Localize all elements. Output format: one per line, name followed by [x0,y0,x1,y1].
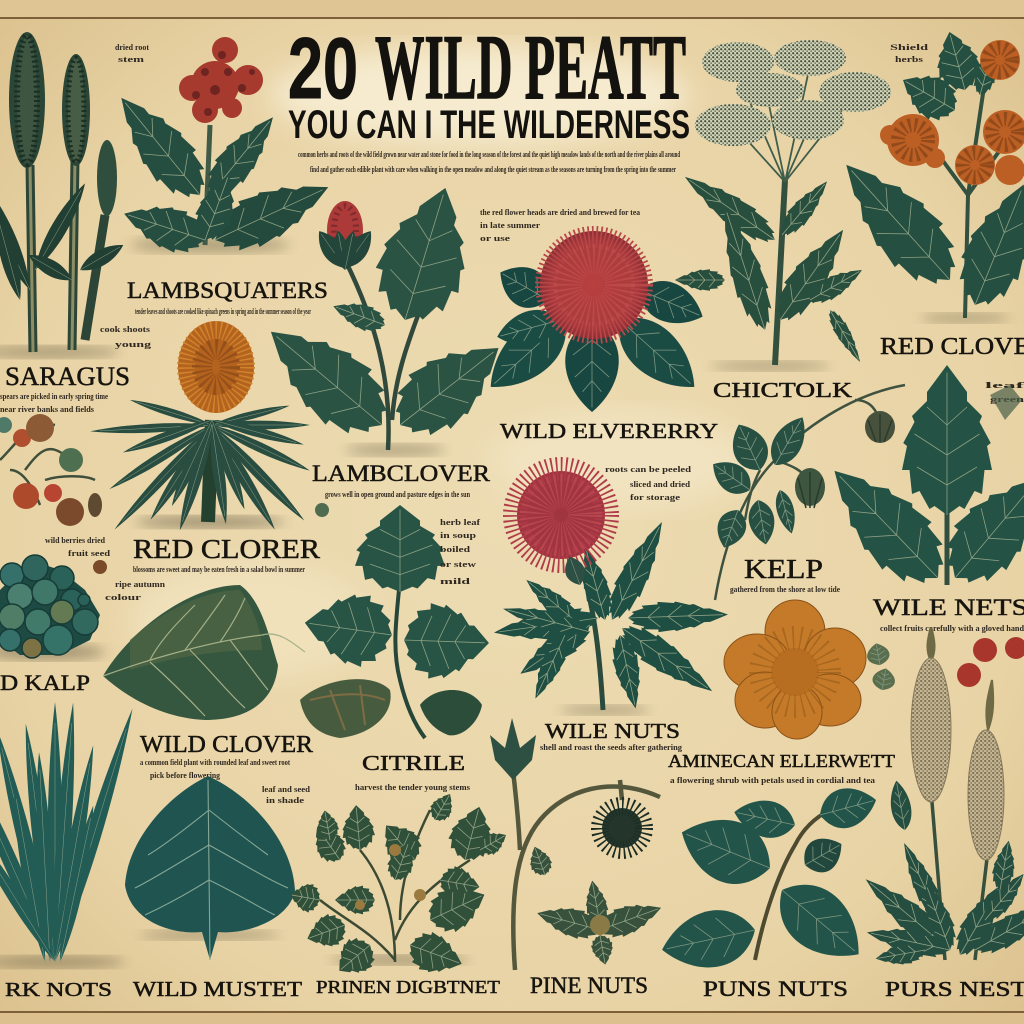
title: WILD PEATT [375,16,686,118]
plant: teal berry cluster [0,555,105,660]
plant: broad olive leaf [103,585,305,720]
small text: centre right note [605,465,692,502]
small text: red clorer: blossoms are sweet and may be eaten fresh in a salad bowl in summer [133,565,305,574]
small text: top right note: Shield [890,43,929,52]
icon: small seed [93,560,107,574]
small text: wild clover: pick before flowering [150,771,220,780]
label: prinen digbtnet: PRINEN DIGBTNET [316,977,500,997]
small text: centre right note: for storage [630,493,681,502]
plant: white umbel [675,40,891,371]
plant: orange blossom [724,600,897,739]
title [288,16,686,118]
small text: three leaf herb: in soup [440,531,477,540]
plant: orange spiky thistle [90,321,329,533]
plant: crimson thistle with palmate leaves [492,469,728,715]
label: american elderwett: AMINECAN ELLERWETT [668,751,895,771]
plant: curved stem with spiky seed head [490,718,666,970]
icon: small flower sketch right [990,385,1022,420]
plant: smooth teal leaves [656,781,881,977]
small text: wild clover: in shade [266,796,305,805]
label: kelp: KELP [744,554,823,584]
small text: elverberry note: in late summer [480,221,541,230]
small text: centre right note: sliced and dried [630,480,691,489]
plant: kelp with hanging buds [705,385,905,600]
small text: asparagus: spears are picked in early spring time [0,392,108,401]
small text: lambsquaters: cook shoots [100,325,150,334]
plant: bushy herb [288,789,511,985]
small text: wild clover: a common field plant with rounded leaf and sweet root [140,758,290,767]
label: wild nuts: WILE NUTS [545,719,680,743]
label: red clorer: RED CLORER [133,534,320,564]
small text: three leaf herb: boiled [440,545,471,554]
plant: lambsquarters [102,37,339,263]
small text: citrile: harvest the tender young stems [355,783,470,792]
small text: three leaf herb [440,518,480,586]
small text: berries: ripe autumn [115,580,166,589]
label: red clover: RED CLOVE [880,334,1024,360]
small text: asparagus note: stem [118,55,145,64]
small text: centre right note: roots can be peeled [605,465,692,474]
small text: wild clover [140,758,311,805]
small text: three leaf herb: herb leaf [440,518,480,527]
title: 20 [288,21,358,117]
small text: top right note: herbs [895,55,923,64]
plant: red thistle flower [475,231,710,412]
plant: nettle with red bud [248,175,520,456]
label: pine nuts: PINE NUTS [530,973,648,998]
small text: berries: fruit seed [68,549,111,558]
small text: wild nuts: shell and roast the seeds after gathering [540,743,682,752]
plant: tall grass blades [0,702,139,968]
small text: berries: colour [105,593,142,602]
label: wild elverberry: WILD ELVERERRY [500,419,718,443]
small text: top right note [890,43,929,64]
small text: asparagus note [115,43,149,64]
label: citrile: CITRILE [362,751,465,775]
intro text [298,150,680,174]
subtitle: YOU CAN I THE WILDERNESS [288,103,690,147]
label: lambsquaters: LAMBSQUATERS [127,278,328,303]
small text: elverberry note [480,208,640,243]
small text: asparagus note: dried root [115,43,149,52]
plant: orange flowers top right [822,26,1024,323]
label: purs nest: PURS NEST [885,977,1024,1001]
small text: berries [45,536,166,602]
label: asparagus: SARAGUS [5,362,130,391]
small text: american: a flowering shrub with petals used in cordial and tea [670,776,875,785]
label: wild mustet: WILD MUSTET [133,977,302,1001]
label: chicory: CHICTOLK [713,378,852,402]
intro text: find and gather each edible plant with care when walking in the open meadow and along the quiet stream as the seasons are turning from the spring into the summer [310,165,676,174]
small text: asparagus: near river banks and fields [0,405,94,414]
plant: large three leaves [810,365,1024,602]
label: wild clover: WILD CLOVER [140,732,313,758]
small text: asparagus [0,392,108,414]
small text: three leaf herb: mild [440,577,471,586]
small text: lambsquaters: tender leaves and shoots are cooked like spinach greens in spring and in the summer season of the year [135,307,311,316]
label: park nots: RK NOTS [5,979,112,1001]
small text: lambsquaters: young [115,340,151,349]
label: wild nets: WILE NETS [873,595,1024,620]
label: kalp: D KALP [0,670,90,695]
small text: berries: wild berries dried [45,536,106,545]
label: puns nuts: PUNS NUTS [703,976,848,1001]
intro text: common herbs and roots of the wild field grown near water and stone for food in the long season of the forest and the quiet high meadow lands of the north and the river plains all around [298,150,680,159]
small text: right note: leaf [985,381,1024,390]
label: lambclover: LAMBCLOVER [312,461,491,486]
small text: elverberry note: the red flower heads are dried and brewed for tea [480,208,640,217]
plant: asparagus [0,32,127,358]
plant: cattails and red berries [856,628,1024,969]
plant: teal heart leaf [125,776,295,960]
small text: elverberry note: or use [480,234,511,243]
small text: three leaf herb: or stew [440,560,476,569]
plant: three leaf herb [300,505,490,738]
small text: lambclover: grows well in open ground and pasture edges in the sun [325,490,470,499]
small text: lambsquaters [100,307,311,349]
small text: wild clover: leaf and seed [262,785,311,794]
small text: right note: green [990,395,1024,404]
small text: kelp: gathered from the shore at low tide [730,585,840,594]
small text: wild nets: collect fruits carefully with a gloved hand [880,624,1024,633]
plant: red and green berries [0,414,102,526]
small text: right note [985,381,1024,404]
